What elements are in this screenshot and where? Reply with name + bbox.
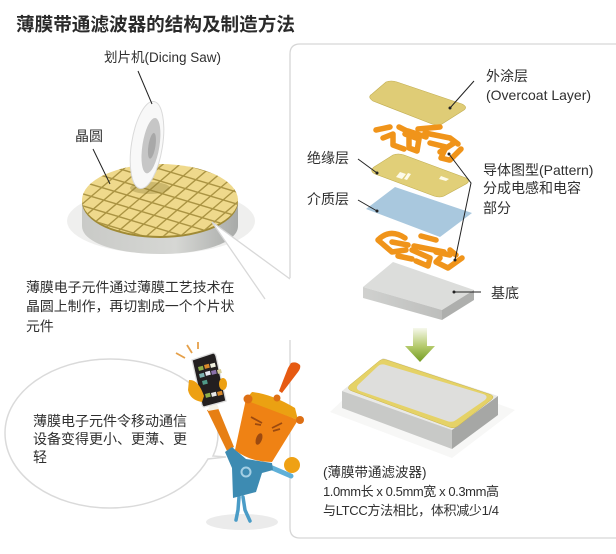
dielectric layer (366, 187, 472, 237)
leader: wafer (93, 149, 110, 184)
leaders: layers (358, 81, 481, 292)
leader: dicing saw (138, 71, 152, 104)
callout wedge from wafer to panel (212, 222, 290, 299)
insulation layer (372, 154, 468, 197)
label: insulation layer: 绝缘层 (307, 150, 349, 166)
wafer shadow (67, 188, 255, 254)
title: 薄膜带通滤波器的结构及制造方法 (16, 14, 295, 35)
text: filter spec: 与LTCC方法相比，体积减少1/4 (323, 503, 499, 518)
wafer rim (82, 166, 238, 238)
text: bubble: 设备变得更小、更薄、更 (33, 431, 187, 447)
leader dots (376, 106, 456, 294)
ground shadow (206, 514, 278, 530)
legs (236, 497, 250, 521)
label: conductor pattern: 部分 (483, 200, 511, 216)
text: wafer description: 薄膜电子元件通过薄膜工艺技术在 (26, 279, 234, 295)
exclamation mark (279, 362, 300, 393)
character mascot (176, 342, 304, 530)
substrate (363, 262, 474, 320)
gold frame (348, 359, 493, 428)
lower pattern (378, 233, 462, 268)
label: substrate: 基底 (491, 285, 519, 301)
exploded layers (363, 81, 474, 320)
text: wafer description: 晶圆上制作，再切割成一个个片状 (26, 298, 234, 314)
wafer disc (82, 164, 238, 236)
arrow: green down (405, 328, 435, 362)
text: filter spec: 1.0mm长 x 0.5mm宽 x 0.3mm高 (323, 484, 499, 499)
label: conductor pattern (483, 162, 593, 216)
label: wafer: 晶圆 (75, 128, 103, 144)
arm cuff (208, 404, 219, 411)
finished filter (330, 358, 515, 458)
text: bubble: 薄膜电子元件令移动通信 (33, 413, 187, 429)
head (235, 399, 298, 462)
hand fingers on phone (188, 380, 204, 402)
speech bubble (5, 359, 226, 508)
shirt (225, 447, 273, 498)
saw shadow on wafer (130, 182, 170, 194)
shirt logo (242, 468, 250, 476)
phone app icons (198, 363, 223, 398)
right arm (270, 467, 291, 476)
raised arm (207, 408, 234, 451)
ear knobs (244, 394, 304, 424)
head top (245, 392, 298, 420)
label: overcoat layer: (Overcoat Layer) (486, 87, 591, 103)
text: filter spec (323, 465, 499, 518)
text: bubble (33, 413, 187, 465)
upper pattern (376, 127, 461, 160)
text: filter spec: (薄膜带通滤波器) (323, 465, 426, 480)
filter shadow (330, 362, 515, 458)
wafer grid (82, 164, 238, 236)
label: dielectric layer: 介质层 (307, 191, 349, 207)
face (251, 417, 282, 431)
overcoat layer (370, 81, 466, 125)
filter right side (452, 396, 498, 449)
inner gray surface (357, 364, 487, 422)
insulation openings (396, 172, 449, 181)
wafer base (82, 203, 238, 254)
label: dicing saw: 划片机(Dicing Saw) (104, 50, 221, 65)
text: wafer description: 元件 (26, 318, 54, 334)
label: overcoat layer (486, 68, 591, 103)
right fist (284, 457, 300, 473)
phone (192, 353, 226, 407)
panel: filter structure (290, 44, 616, 538)
text: wafer description (26, 279, 234, 334)
label: conductor pattern: 分成电感和电容 (483, 180, 581, 196)
filter front side (342, 391, 452, 449)
label: overcoat layer: 外涂层 (486, 68, 528, 84)
label: conductor pattern: 导体图型(Pattern) (483, 162, 593, 178)
wafer and dicing saw illustration (67, 101, 255, 254)
text: bubble: 轻 (33, 449, 47, 465)
spark lines (176, 342, 198, 358)
dicing saw blade (125, 99, 169, 191)
filter top (342, 358, 498, 430)
